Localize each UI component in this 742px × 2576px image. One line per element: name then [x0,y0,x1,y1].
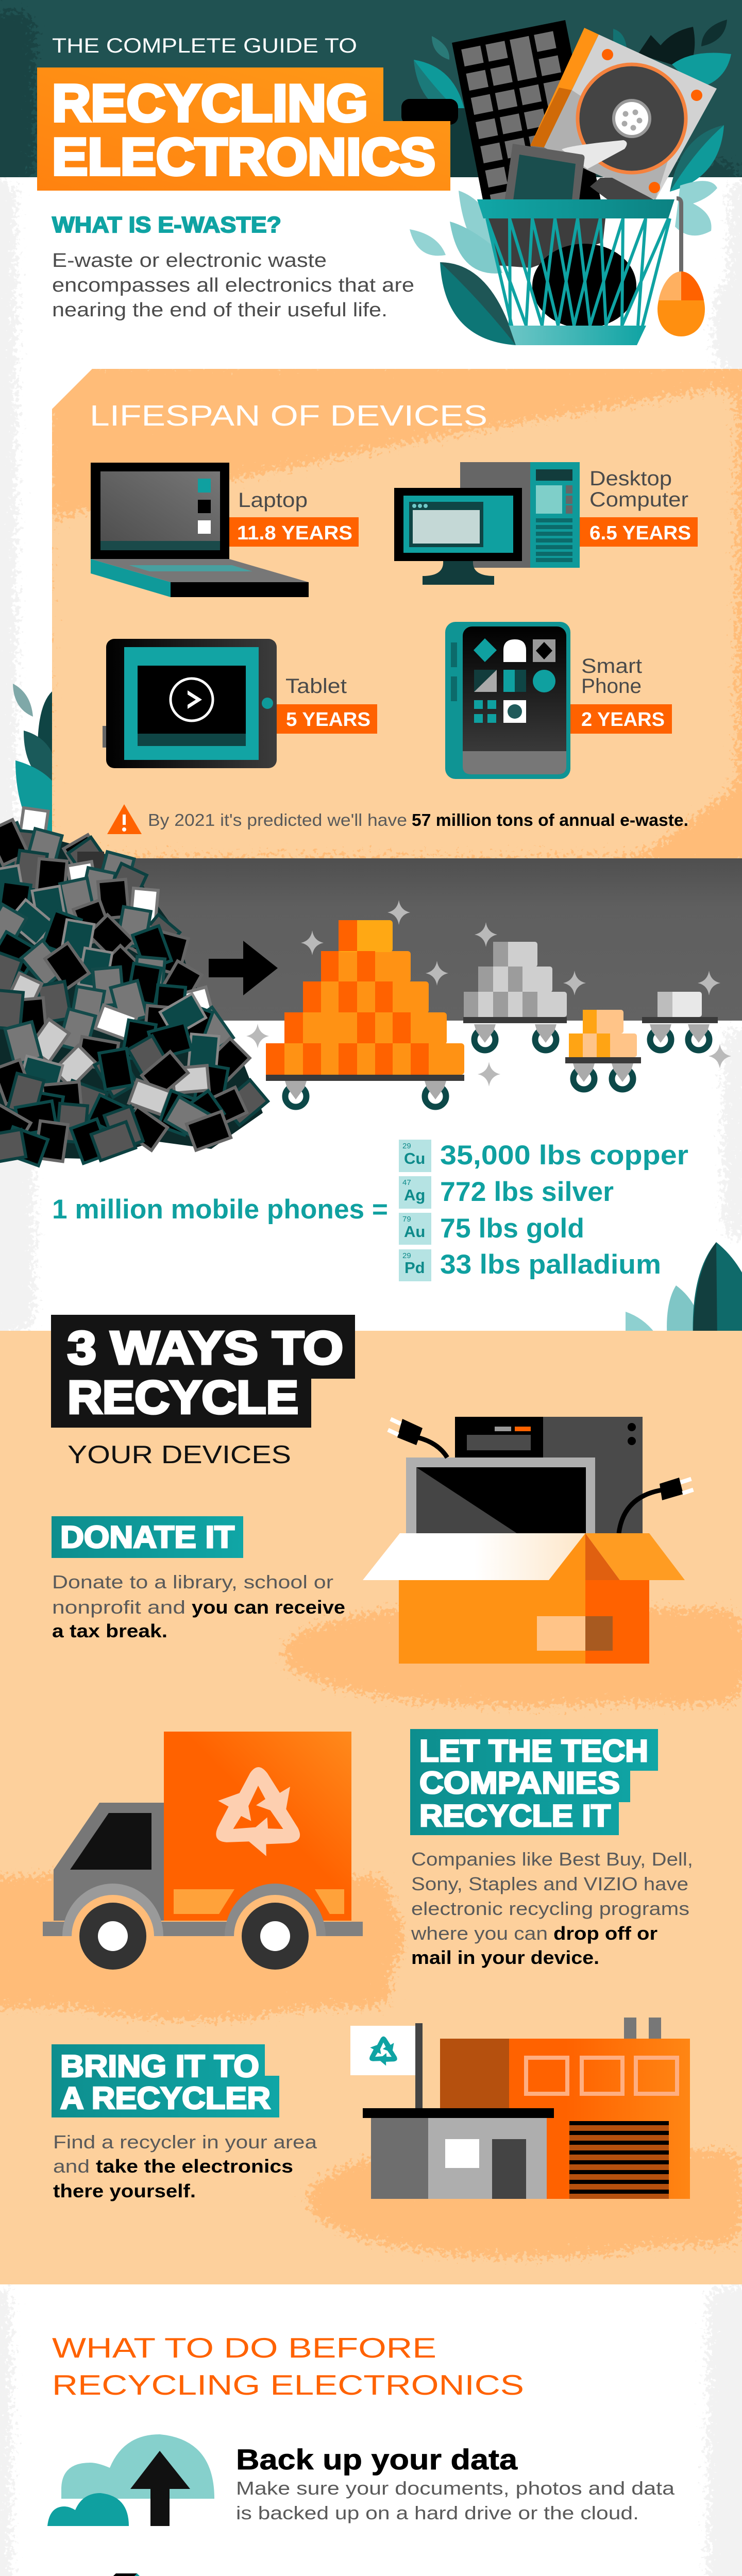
basket net [487,218,670,330]
badge: donate it: DONATE IT [60,1520,234,1554]
device: laptop: Laptop [238,489,308,512]
badge: let the tech companies: LET THE TECH [419,1734,648,1768]
heading box: 3 ways: 3 WAYS TO [68,1323,343,1374]
callout: e-waste forecast: By 2021 it's predicted we'll have [148,810,407,829]
heading: what to do before: RECYCLING ELECTRONICS [52,2369,524,2401]
text: tech companies: electronic recycling programs [411,1898,689,1919]
element: silver: Ag [404,1186,425,1204]
arrow [209,941,278,995]
hard drive [530,28,717,200]
subheading: YOUR DEVICES [68,1441,291,1469]
callout: e-waste forecast [148,810,688,829]
text: tech companies: Companies like Best Buy, Dell, [411,1849,693,1870]
text: bring it: Find a recycler in your area [53,2131,317,2153]
heading box: 3 ways [51,1315,355,1428]
device: laptop: 11.8 YEARS [237,522,352,544]
illustration: e-waste basket [401,20,731,345]
illustration: recycling building [350,2018,690,2199]
header background [0,0,742,191]
text: bring it [53,2131,317,2201]
device: desktop computer: Desktop [589,467,672,490]
device: smart phone: 2 YEARS [581,709,665,731]
device: tablet: Tablet [285,675,347,698]
plug left [387,1417,447,1458]
text: donate [52,1571,345,1641]
element: copper: 29 [402,1142,411,1150]
device: desktop computer: Computer [589,488,688,511]
text: donate: you can receive [192,1597,345,1618]
intro text [52,250,414,321]
plug right [619,1477,694,1533]
text: bring it: take the electronics [96,2156,293,2177]
device: laptop [91,463,359,597]
text: tech companies [411,1849,693,1968]
gray band [0,858,742,1021]
left leaves [13,684,54,855]
keyboard [452,20,602,228]
element: copper: 35,000 lbs copper [440,1140,688,1171]
title kicker: THE COMPLETE GUIDE TO [52,35,357,57]
heading: what to do before: WHAT TO DO BEFORE [52,2332,436,2364]
illustration: truck [43,1732,363,1977]
title box [37,67,450,191]
step: back up: Back up your data [236,2443,518,2476]
heading box: 3 ways: RECYCLE [68,1372,298,1423]
heading: what is e-waste: WHAT IS E-WASTE? [52,212,281,238]
intro text: E-waste or electronic waste [52,250,327,272]
text: donate: nonprofit and [52,1597,185,1618]
sparkles [246,900,731,1087]
illustration: donation box [363,1417,694,1664]
text: donate: Donate to a library, school or [52,1571,333,1592]
gold pile on cart [266,920,464,1107]
monitor and mouse body in basket [487,218,636,328]
panel: lifespan of devices [44,361,742,871]
text: donate: a tax break. [52,1620,167,1641]
text: bring it: there yourself. [53,2180,196,2201]
icon: cloud upload [47,2434,214,2526]
small silver pile on cart [642,992,718,1050]
heading: lifespan: LIFESPAN OF DEVICES [90,399,487,432]
heading: what to do before [52,2332,524,2401]
text: tech companies: Sony, Staples and VIZIO have [411,1873,688,1894]
silver pile on cart [463,942,567,1050]
device: smart phone: Phone [581,675,642,698]
step: remove storage [66,2573,673,2576]
badge: bring it [52,2044,279,2117]
callout: e-waste forecast: 57 million tons of annual e-waste. [412,810,688,829]
leaves behind [410,20,731,345]
intro text: encompasses all electronics that are [52,275,414,296]
intro text: nearing the end of their useful life. [52,299,387,321]
tablet in basket [497,144,584,264]
badge: bring it: A RECYCLER [60,2081,271,2115]
element: gold: 79 [402,1215,411,1224]
step: back up [47,2434,675,2526]
device: desktop computer: 6.5 YEARS [589,522,691,544]
element: palladium: 33 lbs palladium [440,1249,661,1280]
leaves above 3 ways [626,1242,742,1340]
badge: let the tech companies: RECYCLE IT [419,1799,611,1833]
element: copper: Cu [404,1149,425,1167]
badge: let the tech companies [410,1729,658,1835]
device: smart phone: Smart [581,655,642,677]
small gold pile on cart [565,1010,641,1089]
element: gold: 75 lbs gold [440,1213,584,1244]
element: gold: Au [404,1223,425,1241]
text: tech companies: where you can [411,1923,548,1944]
basket base [509,326,646,345]
element: silver: 47 [402,1178,411,1187]
basket rim [477,199,674,218]
text: bring it: and [53,2156,90,2177]
badge: let the tech companies: COMPANIES [419,1766,620,1800]
device: smart phone [445,622,672,779]
icon: warning [107,804,142,834]
device: tablet: 5 YEARS [286,709,370,731]
text: tech companies: mail in your device. [411,1947,599,1968]
badge: bring it: BRING IT TO [60,2049,259,2083]
element: silver: 772 lbs silver [440,1177,614,1207]
black handle shape [401,99,458,125]
pile of phones [0,808,268,1166]
mouse [657,198,705,336]
icon: usb drive [66,2573,211,2576]
panel: 3 ways to recycle [0,1315,742,2284]
text: tech companies: drop off or [553,1923,657,1944]
device: desktop computer [394,462,698,585]
equation label: 1 million mobile phones = [52,1194,388,1225]
title box: RECYCLING [52,75,368,132]
step: back up: Make sure your documents, photos and data [236,2478,675,2499]
device: tablet [103,639,377,768]
title box: ELECTRONICS [52,128,435,186]
element: palladium: 29 [402,1251,411,1260]
element: palladium: Pd [404,1259,425,1277]
step: back up: is backed up on a hard drive or the cloud. [236,2502,639,2523]
